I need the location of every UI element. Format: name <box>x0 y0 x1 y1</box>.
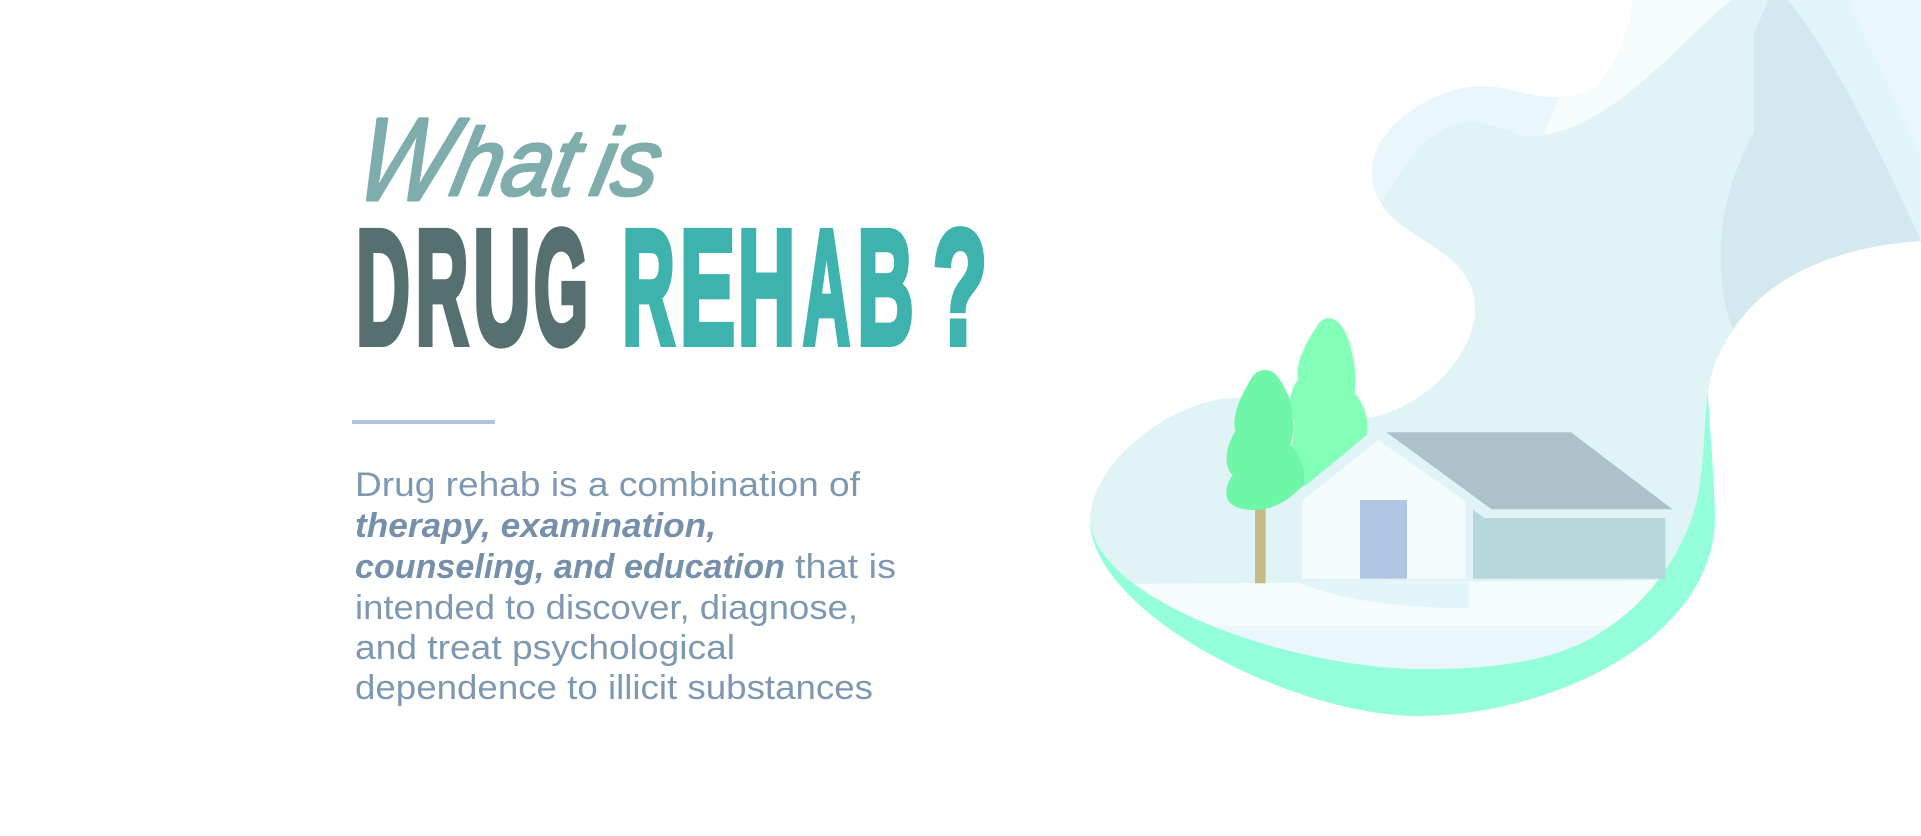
divider rule <box>352 420 495 424</box>
heading word: DRUG: U <box>473 197 531 379</box>
ground <box>1134 580 1658 669</box>
title: DRUG REHAB? <box>356 195 987 379</box>
far right lightest band <box>1848 0 1921 157</box>
heading word: DRUG: G <box>534 195 588 379</box>
main pale blue blob <box>1090 0 1921 669</box>
garage roof <box>1386 432 1673 509</box>
illustration: house landscape <box>1090 0 1921 716</box>
darker mountain shade <box>1720 0 1921 330</box>
body text block: that is <box>795 548 896 586</box>
ground: foreground <box>1212 626 1610 669</box>
title: What is <box>347 94 672 226</box>
garage wall <box>1473 509 1665 579</box>
heading word: REHAB ?: A <box>803 198 850 379</box>
heading word: REHAB ? <box>622 196 987 379</box>
heading word: REHAB ?: H <box>738 197 795 379</box>
light blue swirl <box>1372 86 1559 203</box>
front tree trunk <box>1255 508 1266 583</box>
body text block: therapy, examination, <box>355 507 716 545</box>
pale upper strip <box>1544 0 1732 135</box>
body text block: Drug rehab is a combination of <box>355 466 861 504</box>
mint underlayer <box>1090 393 1715 716</box>
title: What is: W <box>347 94 474 226</box>
title: What is: is <box>584 110 672 216</box>
house body <box>1302 440 1466 579</box>
body text block <box>355 466 896 707</box>
right pale band <box>1788 0 1921 241</box>
body text block: intended to discover, diagnose, <box>355 589 858 627</box>
heading word: REHAB ?: R <box>622 196 675 378</box>
heading word: DRUG <box>356 195 588 379</box>
door <box>1360 500 1407 579</box>
heading word: DRUG: R <box>416 196 468 378</box>
title: What is: hat <box>444 110 594 216</box>
heading word: REHAB ?: B <box>857 197 914 379</box>
body text block: and treat psychological <box>355 629 735 667</box>
body text block: counseling, and education <box>355 548 785 586</box>
path to door <box>1299 583 1469 608</box>
heading word: REHAB ?: ? <box>933 196 987 378</box>
body text block: dependence to illicit substances <box>355 669 873 707</box>
front tree <box>1226 370 1304 510</box>
heading word: DRUG: D <box>356 196 410 378</box>
ground: pale road <box>1134 580 1658 626</box>
back tree <box>1290 318 1368 486</box>
heading word: REHAB ?: E <box>680 197 735 379</box>
